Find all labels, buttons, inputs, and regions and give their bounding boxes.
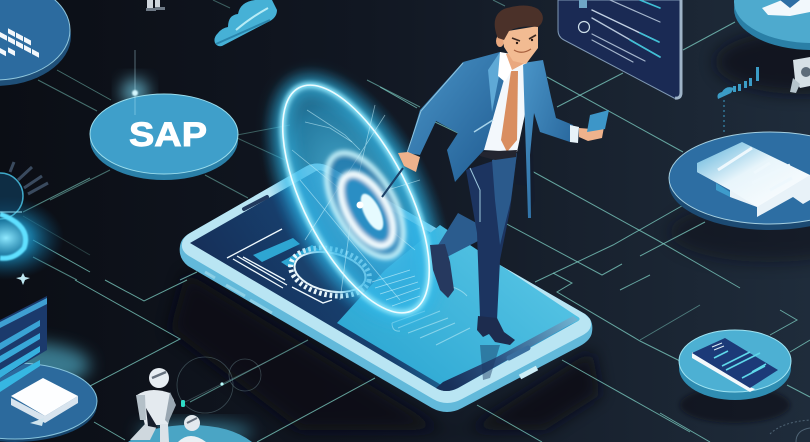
right cuff — [570, 125, 579, 143]
heading: SAP logo text: SAP — [129, 116, 207, 154]
phone screen cyan area — [337, 225, 580, 386]
hair — [495, 6, 543, 40]
face — [502, 26, 538, 64]
disc: bottom-center — [128, 422, 253, 442]
tie — [501, 71, 518, 152]
standing leg — [466, 153, 517, 320]
icon: small robot legs at top — [146, 0, 165, 11]
phone body — [180, 164, 592, 412]
ring lower hatch — [372, 270, 420, 306]
faint screen text — [392, 286, 470, 345]
ring core — [330, 165, 404, 255]
left hand — [398, 152, 420, 172]
businessman — [382, 6, 609, 345]
belt — [480, 150, 517, 160]
shirt — [483, 52, 528, 152]
faint gear at bottom right — [770, 420, 810, 442]
ear — [496, 35, 504, 47]
standing shoe — [477, 316, 515, 345]
icon: white isometric platform — [697, 142, 810, 217]
disc: bottom-left with white box — [0, 296, 97, 442]
disc: right with white structure — [669, 132, 810, 230]
neck — [506, 52, 527, 70]
icon: top cloud — [214, 0, 277, 46]
icon: small cloud with signal bars — [718, 67, 759, 132]
ring outer halo — [253, 64, 459, 334]
handheld phone — [587, 110, 609, 132]
disc: SAP — [90, 50, 238, 180]
disc: top-left with grid — [0, 0, 71, 86]
phone speaker — [509, 348, 528, 358]
shoe reflection — [480, 345, 500, 380]
icon: antenna marker — [181, 400, 185, 407]
icon: white box — [11, 378, 78, 426]
disc: lower-right with document card — [679, 330, 791, 400]
icon: top-right robot — [790, 57, 810, 93]
phone top speaker — [244, 197, 267, 209]
jacket back panel — [515, 110, 535, 218]
icon: grid of white squares — [0, 23, 39, 74]
screen user interface — [227, 229, 470, 345]
raised leg — [435, 213, 482, 257]
icon: server panel — [0, 296, 47, 392]
floating data card — [558, 0, 682, 99]
ring network detail — [292, 105, 420, 300]
collar — [498, 52, 527, 82]
shadows under objects — [170, 30, 810, 432]
phone lower reflection strip — [436, 316, 578, 391]
icon: white box — [762, 0, 810, 16]
phone screen dark — [190, 170, 580, 391]
robots — [130, 368, 206, 442]
robot: large — [130, 368, 176, 442]
disc: top-right — [734, 0, 810, 50]
raised shoe — [430, 244, 454, 298]
right hand — [579, 127, 604, 141]
left jacket and sleeve — [407, 52, 505, 182]
holographic ring — [221, 34, 491, 364]
faint network circles near robots — [177, 357, 266, 413]
robot: small — [178, 415, 206, 442]
card icons — [578, 22, 590, 32]
icon: star spark — [16, 273, 30, 285]
left glowing globe — [0, 162, 64, 285]
card text lines — [592, 0, 660, 62]
gear — [286, 241, 374, 303]
icon: document card — [692, 352, 755, 392]
ring outer inner-ellipse — [311, 140, 419, 270]
phone side buttons — [205, 272, 537, 377]
